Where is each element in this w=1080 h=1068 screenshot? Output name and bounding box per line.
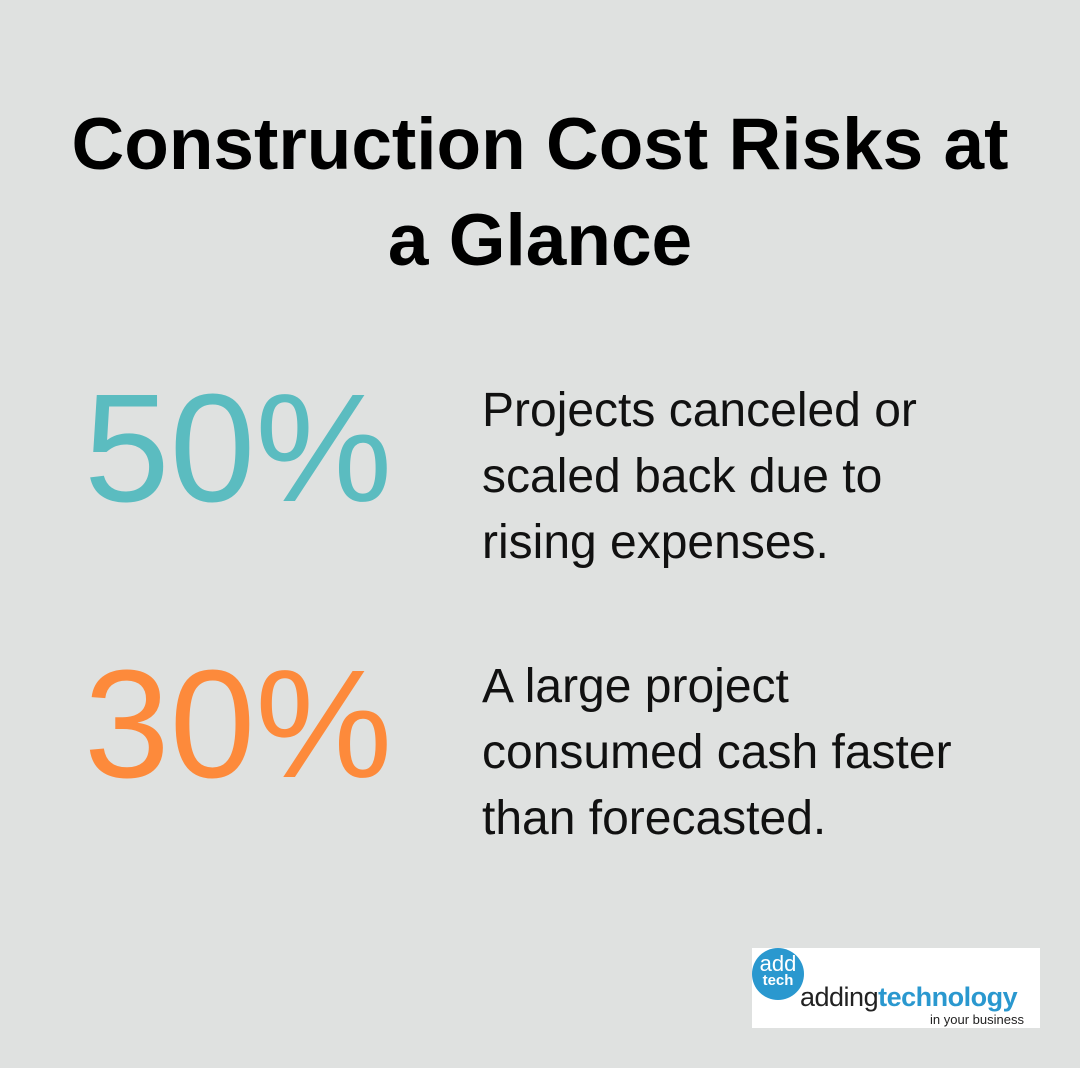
text: 50% description: rising expenses.: [482, 516, 829, 569]
text: 30% description: consumed cash faster: [482, 726, 952, 779]
title: Construction Cost Risks at: [72, 104, 1008, 185]
text: 30% description: [482, 660, 952, 845]
text: 50% description: Projects canceled or: [482, 384, 917, 437]
stat: 50%: 50%: [84, 362, 392, 534]
logo circle: [752, 948, 804, 1000]
text: 30% description: than forecasted.: [482, 792, 826, 845]
text: 50% description: [482, 384, 917, 569]
stat: 30%: 30%: [84, 638, 392, 810]
title: [72, 104, 1008, 281]
text: 50% description: scaled back due to: [482, 450, 882, 503]
logo circle: add: [760, 951, 796, 976]
title: a Glance: [388, 200, 692, 281]
logo circle: tech: [763, 972, 793, 989]
logo tagline: in your business: [930, 1012, 1024, 1027]
text: 30% description: A large project: [482, 660, 789, 713]
logo: [752, 948, 1040, 1028]
logo wordmark: addingtechnology: [800, 982, 1017, 1012]
